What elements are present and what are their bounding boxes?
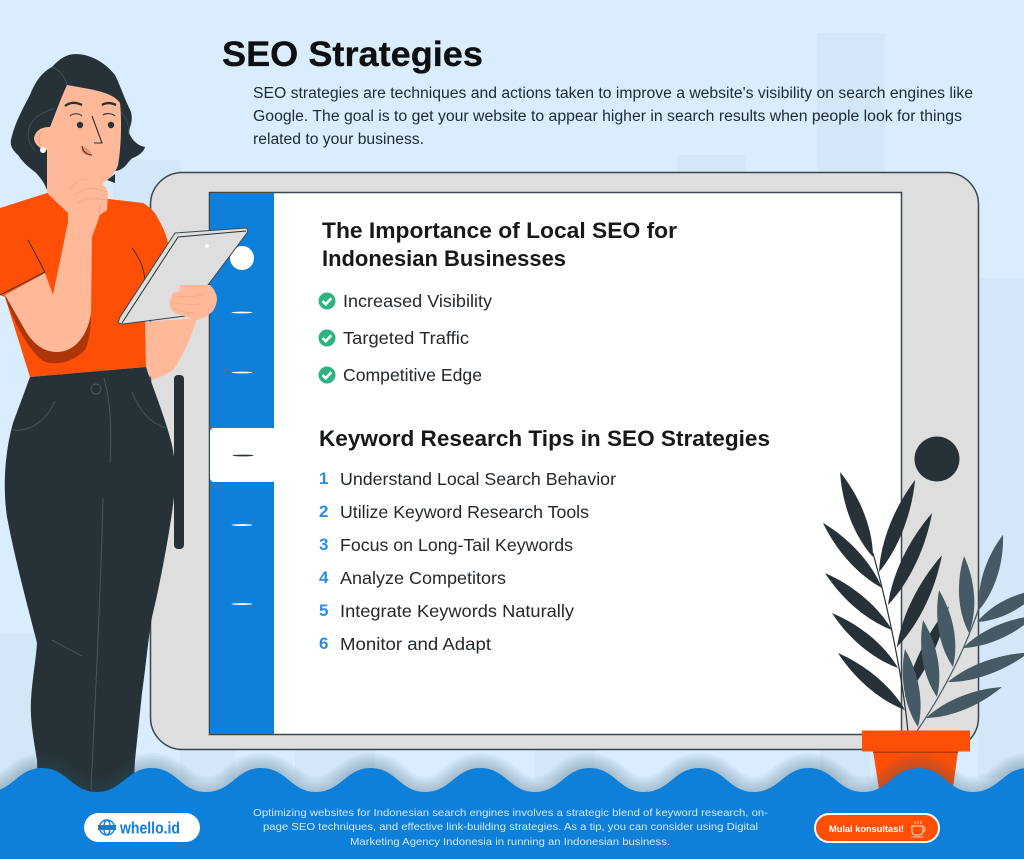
intro text: related to your business.	[253, 131, 424, 148]
button label: Mulai konsultasi!	[829, 824, 904, 835]
nose	[92, 116, 102, 143]
tablet screen	[210, 192, 902, 734]
ear detail	[39, 132, 42, 147]
woman illustration	[0, 54, 248, 800]
earring	[40, 147, 46, 153]
item: targeted traffic: Targeted Traffic	[343, 328, 469, 348]
plant stems	[873, 553, 980, 732]
sleeve creases	[0, 240, 145, 295]
website pill	[84, 813, 200, 842]
heading: importance of local SEO	[322, 218, 677, 271]
intro text	[253, 85, 973, 148]
right arm	[145, 318, 197, 380]
numbered list	[319, 469, 616, 654]
handheld tablet	[118, 228, 248, 324]
finger lines	[70, 179, 106, 215]
plant	[818, 469, 1024, 732]
icon: coffee cup	[911, 821, 925, 837]
plant pot	[862, 730, 970, 795]
tablet side button	[174, 375, 184, 549]
shirt	[0, 193, 168, 377]
right hand	[170, 285, 217, 320]
numbered list: Understand Local Search Behavior	[340, 469, 616, 489]
mouth line	[82, 146, 92, 155]
footer wave	[0, 768, 1024, 859]
tablet device	[150, 172, 978, 750]
numbered list: 4	[319, 568, 329, 587]
handheld tablet camera	[205, 244, 209, 248]
arm shadow	[5, 297, 91, 363]
heading: importance of local SEO: Indonesian Businesses	[322, 246, 566, 271]
intro text: SEO strategies are techniques and actions taken to improve a website's visibility on search engines like	[253, 85, 973, 102]
item: competitive edge: Competitive Edge	[343, 365, 482, 385]
tablet camera	[914, 436, 960, 482]
title: SEO Strategies	[222, 35, 483, 74]
hair	[11, 54, 145, 193]
eyes	[77, 122, 114, 128]
neck and face	[34, 85, 121, 215]
numbered list: Monitor and Adapt	[340, 634, 491, 654]
numbered list: 2	[319, 502, 328, 521]
icon: globe	[98, 820, 116, 835]
left arm and hand	[5, 168, 108, 352]
heading: importance of local SEO: The Importance of Local SEO for	[322, 218, 677, 243]
website label: whello.id	[119, 818, 180, 838]
eyebrows	[65, 103, 116, 116]
numbered list: Focus on Long-Tail Keywords	[340, 535, 573, 555]
wave shadow	[0, 768, 1024, 792]
mouth	[81, 146, 92, 155]
hair strands	[28, 67, 129, 150]
intro text: Google. The goal is to get your website to appear higher in search results when people look for things	[253, 108, 962, 125]
item: increased visibility: Increased Visibility	[343, 291, 492, 311]
heading: keyword research tips: Keyword Research Tips in SEO Strategies	[319, 426, 770, 451]
footer text: Optimizing websites for Indonesian search engines involves a strategic blend of keyword research, on-	[253, 807, 769, 819]
numbered list: 1	[319, 469, 328, 488]
hair strand	[107, 174, 115, 183]
numbered list: 5	[319, 601, 328, 620]
trouser lines	[13, 378, 166, 790]
numbered list: 6	[319, 634, 328, 653]
dark leaves	[818, 469, 954, 715]
light leaves	[898, 533, 1024, 728]
trousers	[5, 367, 175, 800]
handheld tablet edge	[122, 231, 246, 323]
right hand finger lines	[171, 295, 203, 313]
numbered list: 3	[319, 535, 328, 554]
numbered list: Analyze Competitors	[340, 568, 506, 588]
footer text: Marketing Agency Indonesia in running an Indonesian business.	[350, 836, 670, 848]
footer text	[253, 807, 769, 848]
tablet sidebar	[210, 193, 276, 734]
checklist	[318, 291, 492, 385]
consult button	[815, 814, 939, 842]
numbered list: Integrate Keywords Naturally	[340, 601, 574, 621]
footer text: page SEO techniques, and effective link-building strategies. As a tip, you can consider using Digital	[263, 821, 758, 833]
numbered list: Utilize Keyword Research Tools	[340, 502, 589, 522]
